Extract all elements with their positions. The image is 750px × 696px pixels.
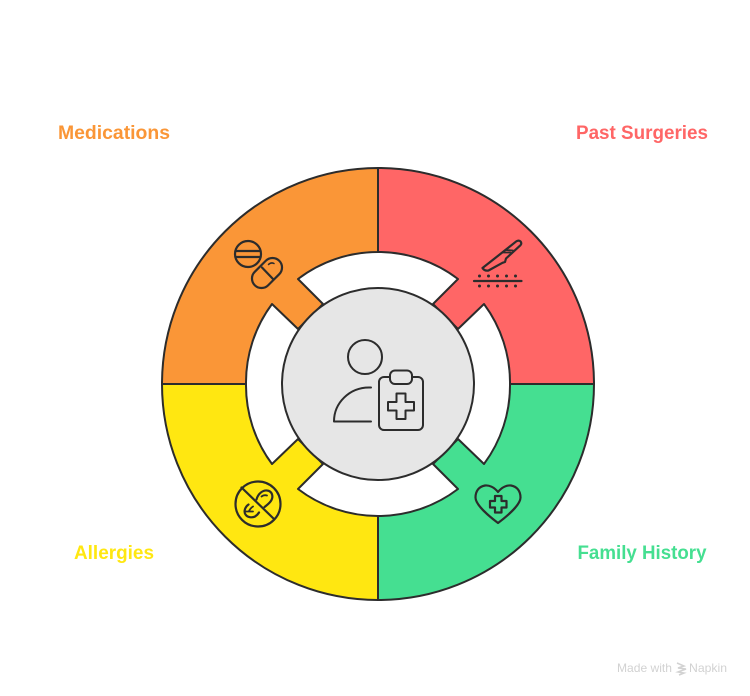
label: Medications: Medications: [58, 123, 170, 144]
footer: Made with Napkin: Napkin: [689, 661, 727, 675]
segment: Allergies: [162, 384, 378, 600]
icon: patient with clipboard: [334, 340, 423, 430]
icon: heart with cross: [476, 485, 520, 523]
label: Family History: Family History: [578, 543, 707, 564]
segment: Family History: [378, 384, 594, 600]
label: Past Surgeries: Past Surgeries: [576, 123, 708, 144]
segment: Medications: [162, 168, 378, 384]
segment: Past Surgeries: [378, 168, 594, 384]
icon: Napkin logo: [677, 663, 686, 675]
center circle: [282, 288, 474, 480]
icon: pills: [235, 241, 286, 292]
label: Allergies: Allergies: [74, 543, 154, 564]
footer: Made with Napkin: Made with: [617, 661, 672, 675]
footer: Made with Napkin: [617, 661, 727, 675]
icon: no pills allergy: [236, 482, 280, 526]
icon: scalpel: [474, 241, 522, 288]
